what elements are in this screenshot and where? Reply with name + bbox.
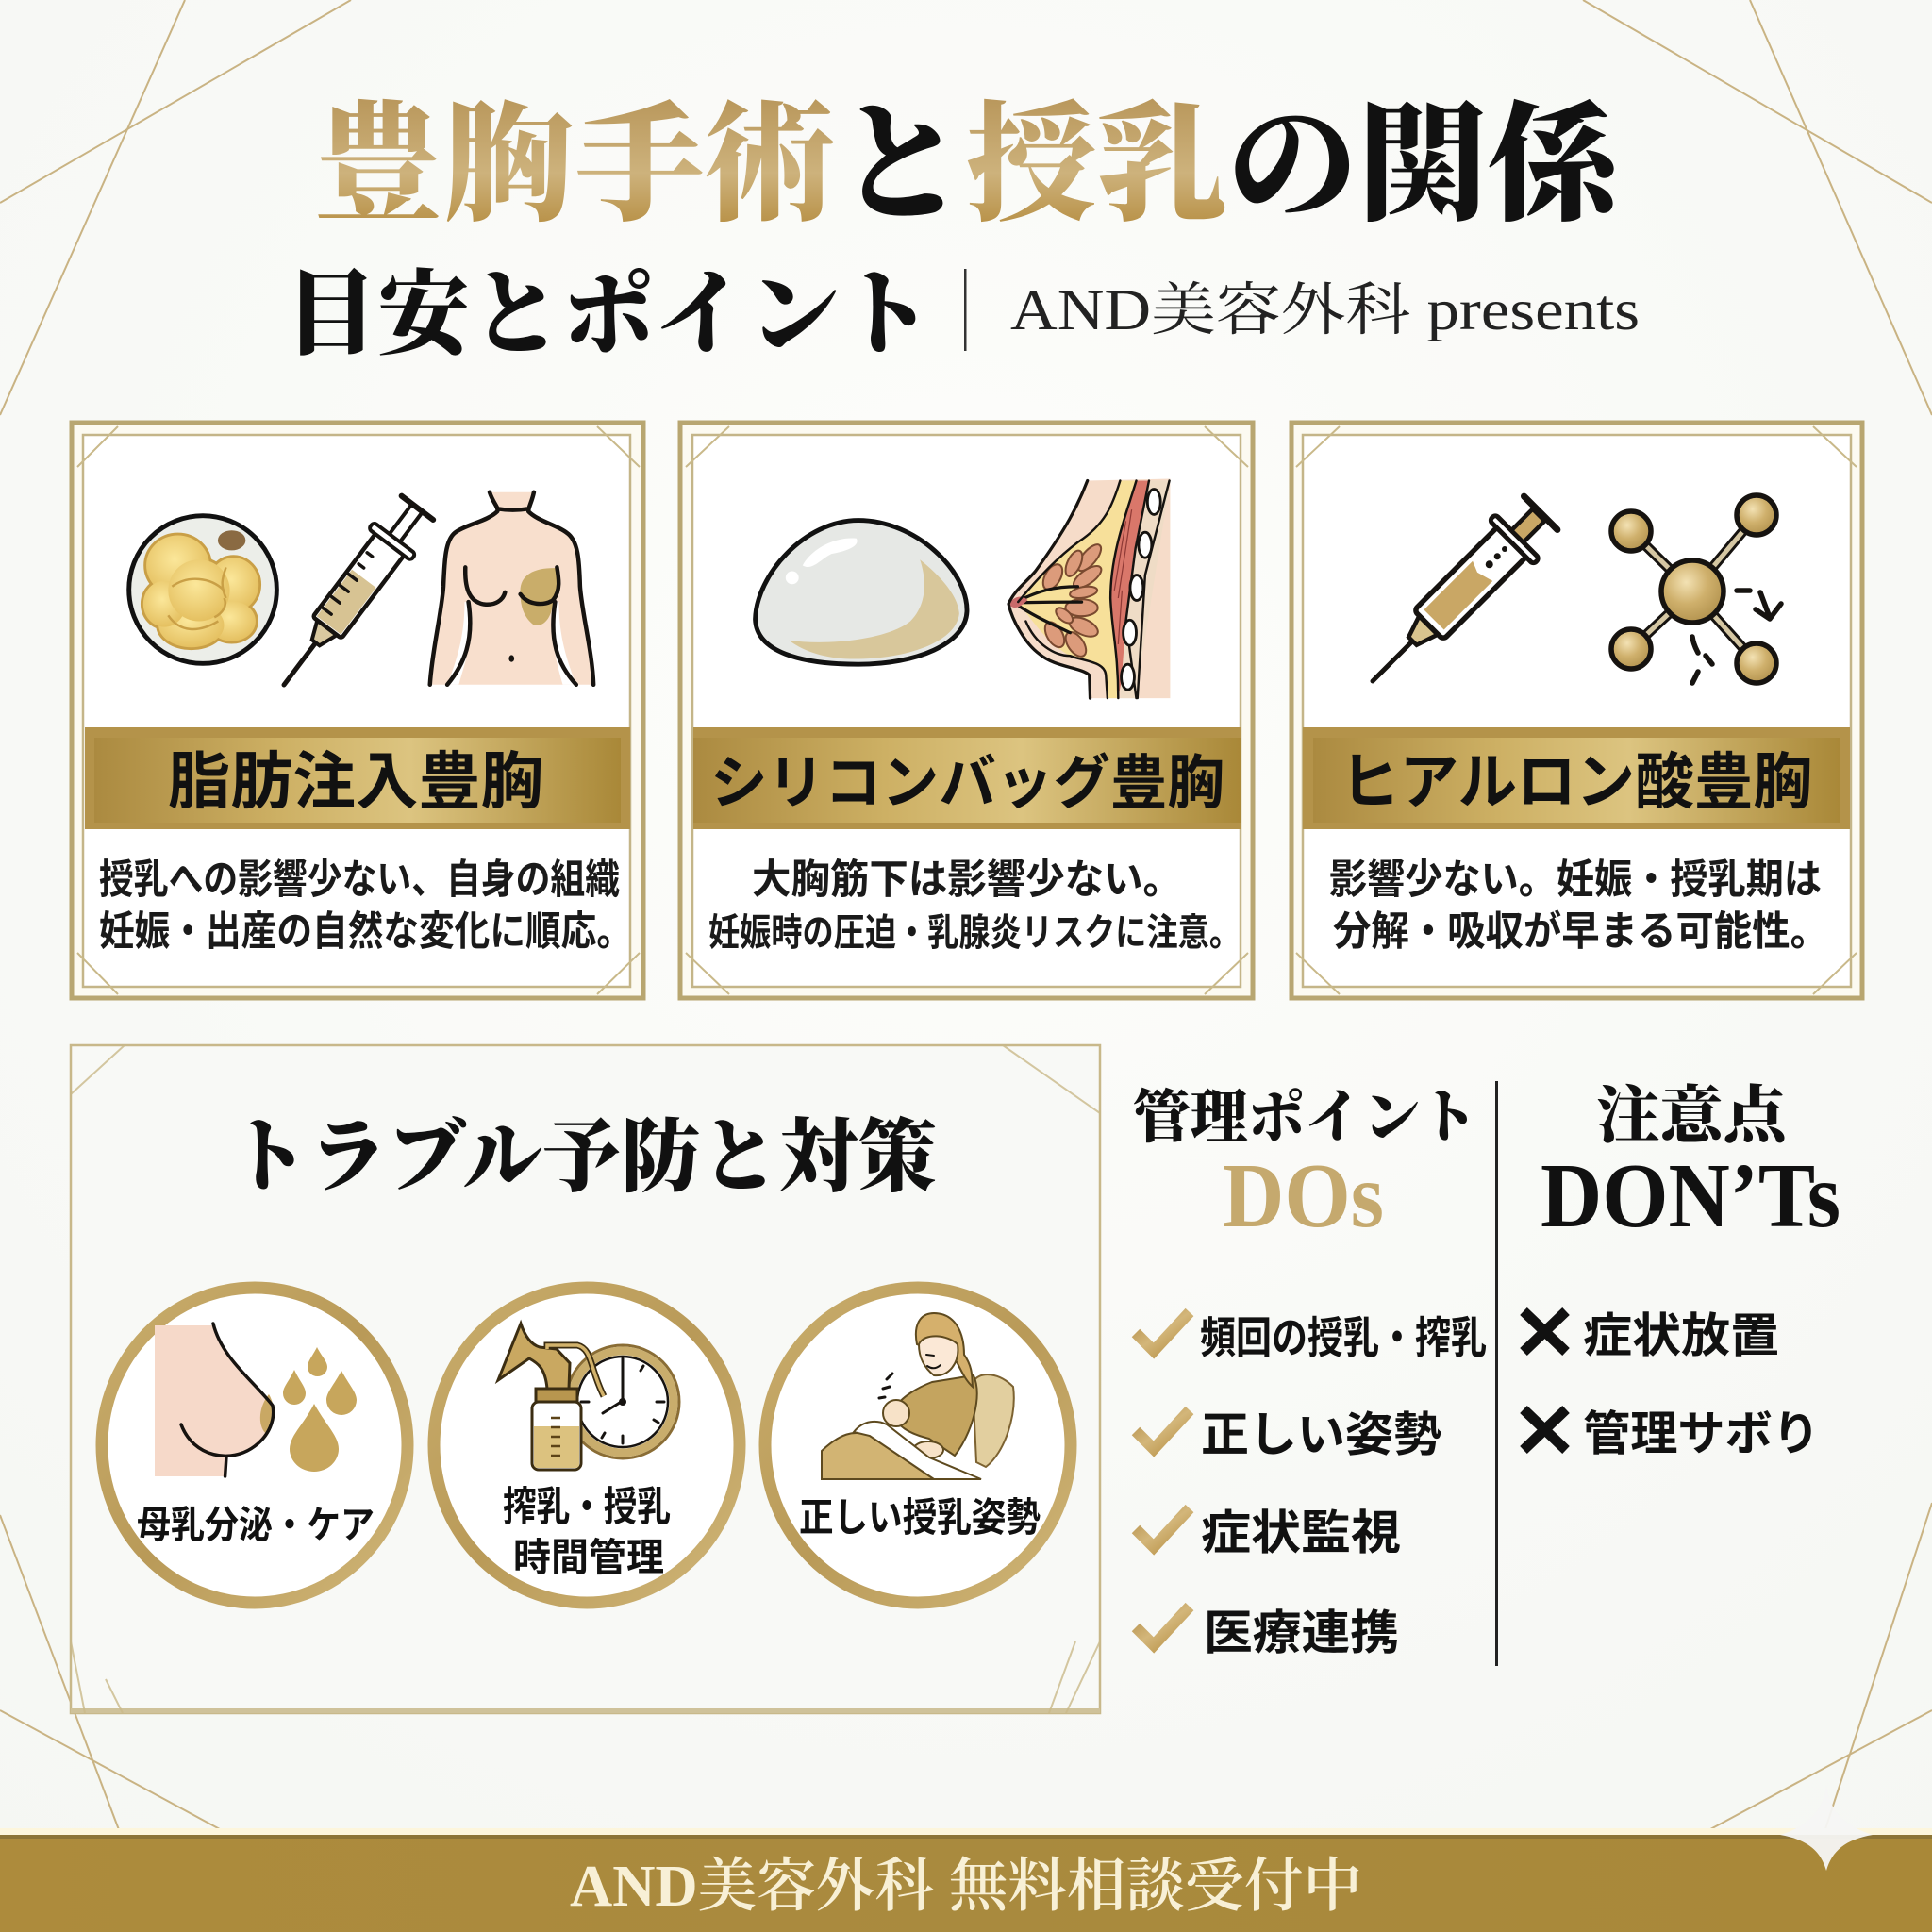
circle: breast milk care: [102, 1288, 408, 1603]
item 2: 管理サボり: [1583, 1407, 1820, 1460]
description: 妊娠・出産の自然な変化に順応。: [99, 909, 632, 955]
circle: correct feeding posture: 正しい授乳姿勢: [799, 1495, 1041, 1540]
subtitle: [285, 265, 1640, 367]
icon: breast cross-section: [1008, 479, 1170, 698]
icon: fat cell: [129, 516, 276, 663]
title: 豊胸手術と授乳の関係: [313, 94, 1629, 238]
description: [99, 858, 632, 955]
heading: 管理ポイント: [1133, 1086, 1477, 1150]
item 1: 頻回の授乳・搾乳: [1200, 1313, 1487, 1362]
heading band: 脂肪注入豊胸: [168, 746, 543, 816]
circle: pumping time management: [434, 1288, 740, 1603]
description: 妊娠時の圧迫・乳腺炎リスクに注意。: [708, 912, 1241, 954]
heading band: [85, 727, 630, 829]
item 1: [1136, 1312, 1487, 1362]
panel: DOs: [1133, 1086, 1487, 1659]
description: [708, 858, 1241, 954]
icon: nursing mother: [822, 1313, 1014, 1479]
icon: breast and drops: [155, 1324, 357, 1476]
panel: silicone implant: [680, 423, 1253, 998]
description: 影響少ない。妊娠・授乳期は: [1329, 858, 1822, 903]
heading band: [1303, 727, 1850, 829]
subtitle: AND美容外科 presents: [1010, 279, 1640, 342]
item 3: 症状監視: [1201, 1507, 1401, 1559]
icon: implant: [756, 521, 967, 664]
panel: hyaluronic acid: [1291, 423, 1862, 998]
subtitle: 目安とポイント: [285, 265, 932, 367]
heading band: [693, 727, 1241, 829]
item 2: 正しい姿勢: [1201, 1408, 1441, 1461]
item 1: 症状放置: [1583, 1309, 1779, 1362]
circle: breast milk care: 母乳分泌・ケア: [137, 1505, 375, 1546]
icon: torso: [430, 492, 593, 685]
circle: pumping time management: 搾乳・授乳: [503, 1485, 671, 1530]
description: 授乳への影響少ない、自身の組織: [99, 858, 620, 903]
panel: DON'Ts: [1524, 1082, 1840, 1460]
icon: breast pump and clock: [498, 1324, 679, 1470]
divider: [1495, 1081, 1498, 1666]
circle: correct feeding posture: [765, 1288, 1071, 1603]
label: DON'Ts: DON’Ts: [1541, 1145, 1840, 1247]
heading band: シリコンバッグ豊胸: [710, 751, 1224, 816]
sparkle: [1780, 1786, 1873, 1871]
icon: syringe: [1351, 491, 1563, 703]
circle: pumping time management: 時間管理: [513, 1536, 664, 1579]
description: 大胸筋下は影響少ない。: [752, 858, 1182, 903]
heading: トラブル予防と対策: [229, 1114, 937, 1203]
panel: fat injection: [72, 423, 643, 998]
heading band: ヒアルロン酸豊胸: [1341, 747, 1812, 816]
label: DOs: DOs: [1223, 1145, 1384, 1247]
footer banner: AND美容外科 無料相談受付中: [570, 1855, 1362, 1919]
icon: syringe: [263, 491, 439, 701]
icon: molecule: [1611, 495, 1781, 683]
panel: trouble prevention: [71, 1045, 1100, 1713]
footer banner: [0, 1828, 1932, 1932]
heading: 注意点: [1596, 1082, 1792, 1151]
description: 分解・吸収が早まる可能性。: [1333, 909, 1828, 955]
description: [1329, 858, 1828, 955]
item 4: 医療連携: [1204, 1607, 1399, 1659]
